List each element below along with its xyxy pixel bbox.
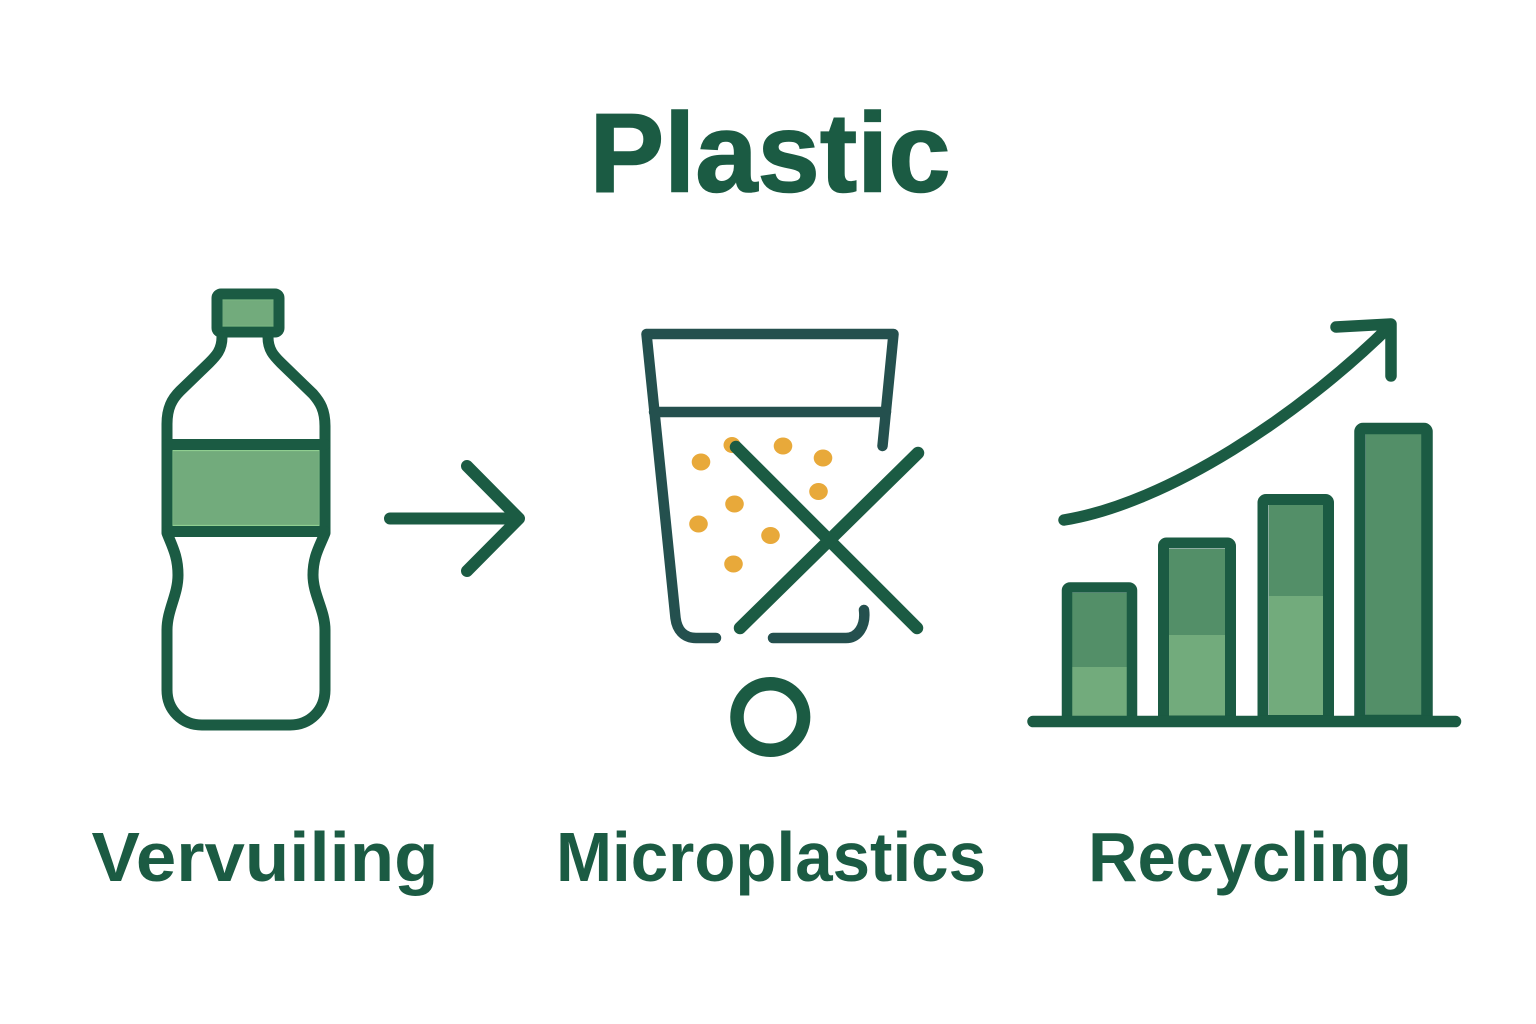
arrow: pollution to microplastics [390, 466, 519, 571]
circle below glass [737, 684, 804, 750]
bar 4 [1360, 428, 1427, 720]
label: Vervuiling: Vervuiling [92, 818, 438, 896]
label: Recycling: Recycling [1088, 818, 1412, 896]
icon: glass with microplastics crossed out [646, 334, 918, 750]
cross mark [736, 447, 918, 628]
title: Plastic [590, 90, 950, 216]
bar 2 [1164, 543, 1230, 721]
bar 3 [1263, 500, 1328, 720]
rising arrow [1064, 324, 1391, 520]
label: Microplastics: Microplastics [556, 818, 986, 896]
icon: plastic bottle [167, 294, 325, 725]
glass outline [646, 334, 894, 638]
baseline [1033, 716, 1456, 727]
icon: recycling bar chart with rising arrow [1033, 324, 1456, 722]
microplastic particles [689, 437, 832, 572]
bar 1 [1067, 588, 1132, 722]
